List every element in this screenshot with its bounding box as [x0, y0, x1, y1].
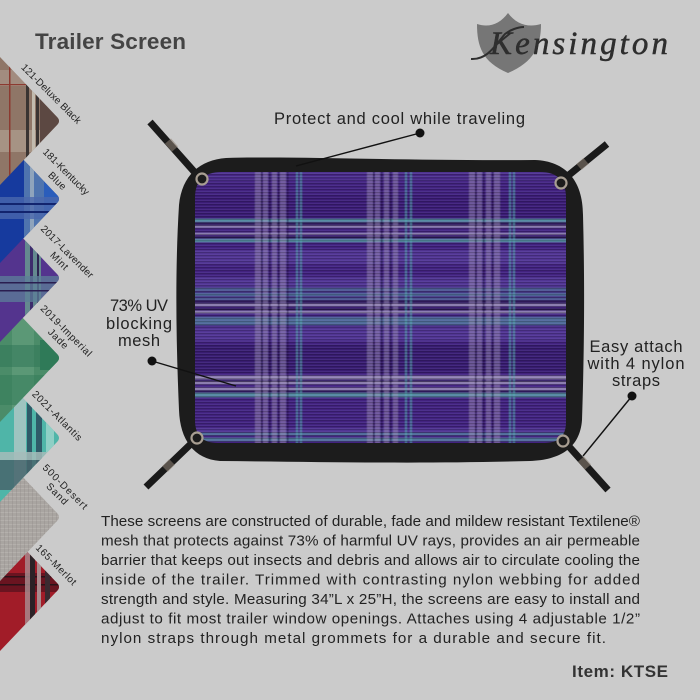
callout: 73% UV blocking mesh: 73% UV [110, 297, 168, 315]
swatch labels: Sand [44, 481, 70, 507]
description text: These screens are constructed of durable, fade and mildew resistant Textilene® [101, 513, 640, 530]
description text [101, 513, 640, 647]
swatch labels: Mint [47, 250, 70, 273]
description text: adjust to fit most trailer window openings. Attaches using 4 adjustable 1/2” [101, 610, 640, 628]
callout: easy attach [583, 338, 684, 456]
swatch: 121-Deluxe Black [0, 57, 59, 185]
swatch: 500-Desert Sand [0, 478, 59, 581]
grommets [192, 174, 568, 446]
swatch labels: 181-Kentucky [40, 147, 91, 198]
logo: Kensington [471, 13, 668, 73]
callout: easy attach: with 4 nylon [586, 355, 684, 373]
swatch labels: 2021-Atlantis [29, 389, 84, 444]
description text: inside of the trailer. Trimmed with contrasting nylon webbing for added [101, 572, 640, 588]
swatch: 165-Merlot [0, 552, 59, 651]
callout: easy attach: Easy attach [590, 338, 682, 356]
swatch: 2021-Atlantis [0, 398, 59, 502]
swatch labels: Jade [45, 327, 70, 352]
swatch labels: 2017-Lavender [38, 224, 96, 281]
callout: protect and cool: Protect and cool while traveling [274, 110, 525, 128]
swatch labels: 2019-Imperial [38, 303, 94, 359]
title: Trailer Screen [35, 29, 186, 54]
callout: 73% UV blocking mesh: mesh [118, 332, 160, 350]
description text: strength and style. Measuring 34”L x 25”H, the screens are easy to install and [101, 591, 640, 608]
callout: 73% UV blocking mesh: blocking [106, 315, 172, 333]
description text: barrier that keeps out insects and debris and allows air to circulate cooling the [101, 552, 640, 569]
swatch labels: 165-Merlot [33, 543, 78, 588]
description text: mesh that protects against 73% of harmful UV rays, provides an air permeable [101, 532, 640, 550]
swatch labels: Blue [45, 170, 68, 193]
swatch: 2019-Imperial Jade [0, 318, 59, 422]
description text: nylon straps through metal grommets for a durable and secure fit. [101, 630, 606, 647]
callout: easy attach: straps [612, 372, 660, 390]
callout: protect and cool [274, 110, 525, 166]
item code: Item: KTSE [572, 662, 668, 681]
swatch labels: 121-Deluxe Black [18, 62, 84, 127]
plaid fabric [190, 168, 570, 448]
straps [146, 122, 608, 490]
swatch: 181-Kentucky Blue [0, 160, 59, 263]
swatch: 2017-Lavender Mint [0, 238, 59, 342]
trailer screen border [176, 158, 584, 463]
callout: 73% UV blocking mesh [106, 297, 236, 386]
logo: Kensington: Kensington [489, 26, 668, 62]
swatch labels [18, 62, 96, 588]
swatch labels: 500-Desert [40, 463, 90, 512]
